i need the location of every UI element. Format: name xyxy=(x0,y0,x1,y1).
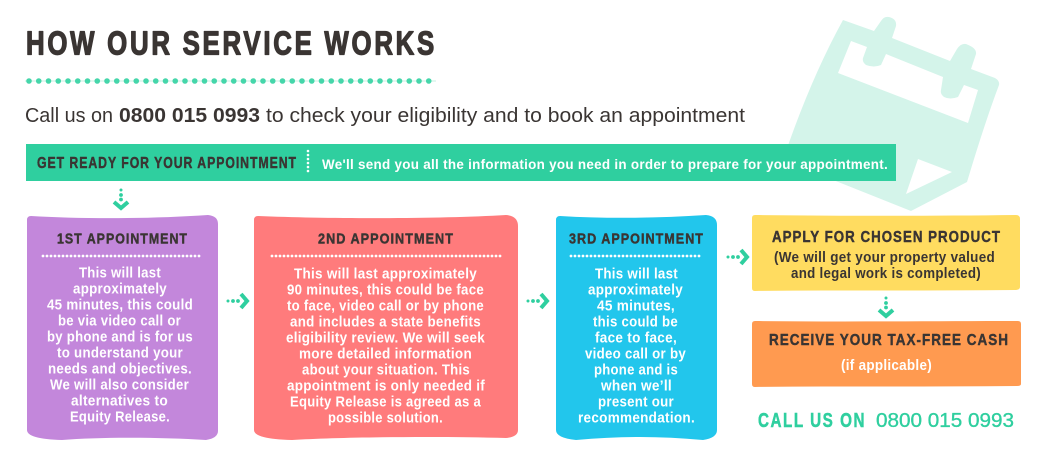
intro text: 0800 015 0993 xyxy=(119,105,260,127)
body text: to face, video call or by phone xyxy=(287,298,484,314)
title dotted divider xyxy=(29,78,433,84)
arrow: banner down to first appointment xyxy=(114,188,128,208)
panel: receive your tax-free cash xyxy=(752,321,1021,387)
body text xyxy=(578,266,695,426)
panel: apply for chosen product xyxy=(752,215,1020,291)
heading: 1ST APPOINTMENT xyxy=(57,230,188,248)
arrow: first to second appointment xyxy=(226,294,247,308)
body text: We will also consider xyxy=(50,378,189,394)
banner: get ready xyxy=(26,144,896,181)
title: HOW OUR SERVICE WORKS xyxy=(26,24,437,62)
body text: about your situation. This xyxy=(302,362,470,378)
body text: be via video call or xyxy=(58,314,181,330)
panel: 1st appointment xyxy=(27,215,218,440)
note: (if applicable) xyxy=(841,358,932,374)
body text: when we’ll xyxy=(600,378,672,394)
call to action: 0800 015 0993 xyxy=(876,410,1014,432)
intro text: to check your eligibility and to book an appointment xyxy=(266,105,745,127)
body text: eligibility review. We will seek xyxy=(286,330,486,346)
body text: 90 minutes, this could be face xyxy=(287,282,484,298)
body text: approximately xyxy=(588,282,683,298)
arrow: third appointment to apply xyxy=(726,250,747,264)
body text: This will last xyxy=(595,266,678,282)
body text: 45 minutes, this could xyxy=(47,298,193,314)
body text: alternatives to xyxy=(71,394,168,410)
body text: video call or by xyxy=(585,346,686,362)
body text: possible solution. xyxy=(328,410,443,426)
body text: more detailed information xyxy=(299,346,472,362)
body text: approximately xyxy=(73,282,167,298)
heading: APPLY FOR CHOSEN PRODUCT xyxy=(772,229,1001,246)
panel: 2nd appointment xyxy=(254,215,518,440)
intro text xyxy=(25,105,745,127)
body text: to understand your xyxy=(57,346,183,362)
body text: (We will get your property valued xyxy=(774,250,995,266)
body text: This will last approximately xyxy=(294,266,477,282)
body text: needs and objectives. xyxy=(48,362,192,378)
body text: Equity Release. xyxy=(70,410,170,426)
body text: This will last xyxy=(79,266,161,282)
banner heading: GET READY FOR YOUR APPOINTMENT xyxy=(37,155,297,172)
body text: and includes a state benefits xyxy=(290,314,481,330)
body text: by phone and is for us xyxy=(47,330,193,346)
banner text: We'll send you all the information you need in order to prepare for your appointment. xyxy=(322,156,888,172)
body text: 45 minutes, xyxy=(597,298,675,314)
call to action xyxy=(758,410,1014,432)
body text: and legal work is completed) xyxy=(791,266,981,282)
arrow: apply down to receive xyxy=(879,296,893,316)
panel: 3rd appointment xyxy=(556,215,717,440)
arrow: second to third appointment xyxy=(526,294,547,308)
body text xyxy=(774,250,995,282)
body text: recommendation. xyxy=(578,410,695,426)
body text: appointment is only needed if xyxy=(287,378,485,394)
icon: calendar background xyxy=(783,17,999,211)
body text: phone and is xyxy=(594,362,678,378)
intro text: Call us on xyxy=(25,105,113,127)
body text: present our xyxy=(598,394,674,410)
body text xyxy=(286,266,486,426)
body text xyxy=(47,266,193,426)
call to action: CALL US ON xyxy=(758,410,866,432)
body text: this could be xyxy=(593,314,678,330)
heading: 2ND APPOINTMENT xyxy=(318,230,454,248)
body text: face to face, xyxy=(595,330,677,346)
heading: 3RD APPOINTMENT xyxy=(569,230,704,248)
body text: Equity Release is agreed as a xyxy=(290,394,482,410)
